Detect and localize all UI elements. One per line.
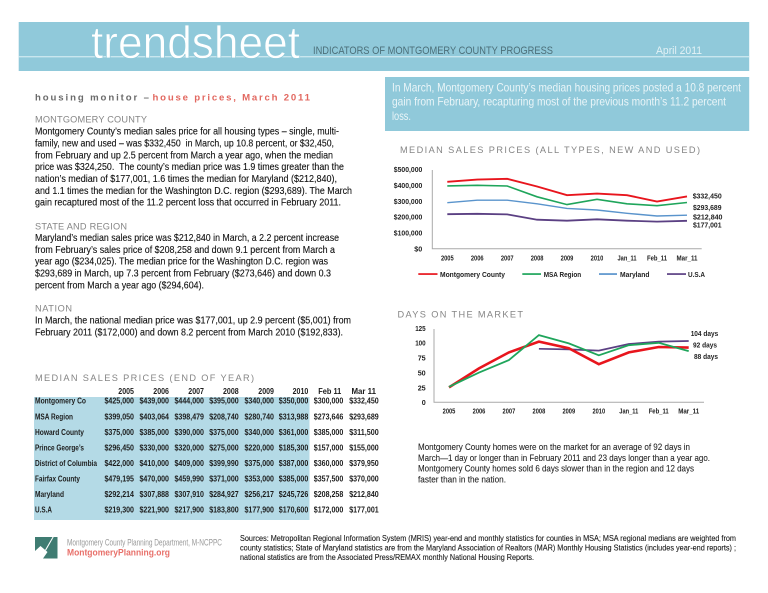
line: Montgomery County [449,342,689,387]
row: District of Columbia: $375,000 [244,459,275,468]
y axis labels: 50 [418,368,426,378]
x axis labels: 2008 [533,407,545,416]
row: Maryland: $212,840 [349,490,379,499]
row: Fairfax County: $459,990 [174,474,205,483]
text block: State and Region: year ago ($234,025). The median price for the Washington D.C. region was [35,256,328,268]
row: Howard County: $375,000 [104,428,135,437]
row: Prince George's: $275,000 [209,443,239,452]
y axis labels: $500,000 [394,165,422,174]
row: Howard County: $390,000 [174,428,205,437]
department credit [67,538,222,558]
row: Fairfax County: $353,000 [244,474,275,483]
end-point labels: 92 days [693,341,717,350]
row: Montgomery Co: $395,000 [209,397,239,406]
text block: Montgomery County: MONTGOMERY COUNTY [35,114,147,124]
row: Prince George's: $320,000 [174,443,205,452]
row: District of Columbia: $399,990 [209,459,239,468]
line: U.S.A [539,341,689,351]
row: U.S.A: $219,300 [104,505,135,514]
y axis labels [394,165,422,254]
row: Prince George's: $220,000 [244,443,275,452]
y axis labels: 125 [415,324,426,333]
row: Howard County: $385,000 [140,428,170,437]
y axis labels: 0 [422,398,426,407]
row: Howard County: $385,000 [314,428,344,437]
x axis labels: 2005 [443,407,455,416]
y axis labels [415,324,426,407]
table header row: 2007 [188,387,204,396]
x axis labels: Feb_11 [649,407,669,416]
text block: days on market commentary: faster than in the nation. [418,475,506,486]
x axis labels: Mar_11 [678,407,699,416]
text block: Montgomery County: nation’s median of $177,001, 1.6 times the median for Maryland ($212,840), [35,174,337,185]
text block: days on market commentary: Montgomery County homes sold 6 days slower than in the region and 12 days [418,464,694,475]
row: U.S.A: $177,900 [244,505,275,514]
department credit: Montgomery County Planning Department, M-NCPPC [67,538,222,548]
row: Howard County: $361,000 [279,428,309,437]
x axis labels: Jan_11 [619,407,638,416]
x axis labels: 2008 [531,253,543,262]
text block: Montgomery County: from February and up 2.5 percent from March a year ago, when the median [35,150,333,161]
row: Montgomery Co: $340,000 [244,397,275,406]
x axis labels: 2006 [473,407,485,416]
row: U.S.A: $172,000 [314,505,344,514]
legend: Montgomery County [440,270,505,279]
text block: Nation [35,304,351,339]
row: Fairfax County: $385,000 [279,474,309,483]
row: MSA Region [35,412,379,421]
row: District of Columbia: $387,000 [279,459,309,468]
row: Maryland: $307,910 [174,490,205,499]
row: Fairfax County: Fairfax County [35,474,81,483]
y axis labels: $300,000 [394,197,422,206]
row: District of Columbia: $410,000 [140,459,170,468]
row: Howard County: $375,000 [209,428,239,437]
table header row: 2010 [293,387,309,396]
text block: Montgomery County [35,114,352,208]
row: Prince George's [35,443,379,452]
table: median sales prices [34,387,379,520]
text block: Montgomery County: Montgomery County’s median sales price for all housing types – single, multi- [35,127,339,138]
row: MSA Region: $398,479 [174,412,205,421]
row: Prince George's: Prince George’s [35,443,85,452]
row: District of Columbia: $409,000 [174,459,205,468]
row: Howard County: $311,500 [349,428,379,437]
text block: days on market commentary [418,442,710,486]
y axis labels: 100 [415,338,426,348]
y axis labels: $400,000 [394,181,422,190]
icon: planning department logo [35,537,58,558]
row: Fairfax County: $371,000 [209,474,239,483]
chart heading: median sales prices: MEDIAN SALES PRICES (ALL TYPES, NEW AND USED) [400,145,700,155]
line chart: days on the market [415,324,718,416]
row: Montgomery Co: $332,450 [349,397,379,406]
row: District of Columbia: $360,000 [314,459,344,468]
x axis labels: 2009 [562,407,575,416]
row: Maryland: $284,927 [209,490,239,499]
row: Fairfax County [35,474,379,483]
row: U.S.A: $177,001 [349,505,379,514]
row: Prince George's: $185,300 [279,443,309,452]
table header row: Feb 11 [318,387,342,396]
x axis labels: Jan_11 [618,253,636,262]
row: Maryland [35,490,379,499]
row: Montgomery Co: $444,000 [174,397,205,406]
table header row: 2009 [258,387,275,396]
line: MSA Region [447,185,687,206]
row: Montgomery Co: $425,000 [104,397,135,406]
subtitle: INDICATORS OF MONTGOMERY COUNTY PROGRESS [313,45,553,57]
line: MSA Region [449,335,689,387]
row: Montgomery Co: $439,000 [140,397,170,406]
callout [385,77,749,131]
row: Maryland: $307,888 [140,490,170,499]
sources note [240,533,736,562]
row: MSA Region: $313,988 [279,412,309,421]
x axis labels: 2010 [592,407,605,416]
line chart: median sales prices [394,165,722,279]
text block: State and Region: percent from March a year ago ($294,604). [35,280,204,292]
row: Maryland: $208,258 [314,490,344,499]
line: Montgomery County [447,179,687,202]
chart heading: days on the market: DAYS ON THE MARKET [398,309,523,319]
row: District of Columbia: $422,000 [104,459,135,468]
end-point labels: 104 days [691,329,718,338]
row: U.S.A: $183,800 [209,505,239,514]
text block: State and Region: from February’s sales price of $208,258 and down 9.1 percent from March a [35,245,335,256]
table header row: Mar 11 [352,387,377,396]
x axis labels: Mar_11 [676,253,698,262]
legend: MSA Region [544,270,581,279]
row: Fairfax County: $370,000 [349,474,379,483]
y axis labels: $200,000 [394,212,422,222]
row: U.S.A: U.S.A [35,505,52,514]
text block: State and Region: STATE AND REGION [35,221,127,231]
row: Howard County: $340,000 [244,428,275,437]
row: Prince George's: $330,000 [140,443,170,452]
row: Fairfax County: $357,500 [314,474,344,483]
row: U.S.A: $221,900 [140,505,170,514]
row: Maryland: $256,217 [244,490,274,499]
end-point labels [691,329,718,361]
text block: days on market commentary: Montgomery County homes were on the market for an average of 92 days in [418,442,690,453]
row: U.S.A: $217,900 [174,505,205,514]
text block: Nation: In March, the national median price was $177,001, up 2.9 percent ($5,001) from [35,316,351,327]
row: MSA Region: $208,740 [209,412,239,421]
row: U.S.A [35,505,379,514]
row: Prince George's: $155,000 [349,443,379,452]
date: April 2011 [656,45,702,57]
row: MSA Region: $403,064 [140,412,170,421]
row: District of Columbia: District of Columbia [35,459,98,468]
table heading: MEDIAN SALES PRICES (END OF YEAR) [35,373,254,383]
x axis labels: 2009 [561,253,573,262]
x axis labels [443,407,699,416]
row: MSA Region: $273,646 [314,412,344,421]
text block: days on market commentary: March—1 day or longer than in February 2011 and 23 days longer than a year ago. [418,453,710,464]
row: MSA Region: $280,740 [244,412,275,421]
row: Fairfax County: $470,000 [140,474,170,483]
end-point labels: $293,689 [693,203,722,212]
end-point labels: 88 days [694,352,718,361]
text block: Montgomery County: and 1.1 times the median for the Washington D.C. region ($293,689). The March [35,186,352,197]
row: MSA Region: $399,050 [104,412,135,421]
legend: Maryland [620,270,650,279]
row: Montgomery Co: Montgomery Co [35,397,86,406]
text block: Montgomery County: family, new and used – was $332,450 in March, up 10.8 percent, or $32,450, [35,139,334,150]
x axis labels: 2007 [503,407,515,416]
row: Prince George's: $157,000 [314,443,344,452]
legend [418,270,705,279]
end-point labels: $332,450 [693,191,722,200]
legend: U.S.A [688,270,705,279]
department credit: MontgomeryPlanning.org [67,548,170,558]
x axis labels [441,253,698,262]
x axis labels: 2005 [441,253,454,262]
section heading: housing monitor [35,92,311,104]
row: Maryland: $245,726 [279,490,309,499]
row: MSA Region: MSA Region [35,412,73,421]
row: Howard County: Howard County [35,428,85,437]
table header row [118,387,377,396]
row: Howard County [35,428,379,437]
x axis labels: 2006 [471,253,484,262]
row: District of Columbia: $379,950 [349,459,379,468]
row: Montgomery Co [35,397,379,406]
end-point labels: $212,840 [693,212,722,221]
x axis labels: 2010 [591,253,603,262]
row: Fairfax County: $479,195 [104,474,135,483]
header band [19,17,749,71]
text block: Montgomery County: gain recaptured most of the 11.2 percent loss that occurred in February 2011. [35,198,341,208]
sources note: national statistics are from the Associated Press/REMAX monthly National Housing Reports. [240,552,534,562]
line: U.S.A [447,214,687,222]
end-point labels [693,191,722,230]
y axis labels: $100,000 [394,228,422,238]
text block: State and Region: $293,689 in March, up 7.3 percent from February ($273,646) and down 0.3 [35,269,331,280]
section heading: housing monitor: housing monitor – [35,92,150,104]
text block: State and Region: Maryland’s median sales price was $212,840 in March, a 2.2 percent increase [35,233,339,244]
table header row: 2006 [153,387,170,396]
text block: State and Region [35,221,339,292]
row: District of Columbia [35,459,379,468]
row: Maryland: Maryland [35,490,64,499]
end-point labels: $177,001 [693,221,722,230]
y axis labels: $0 [414,244,422,254]
text block: Nation: NATION [35,304,72,314]
text block: Nation: February 2011 ($172,000) and down 8.2 percent from March 2010 ($192,833). [35,328,343,339]
text block: Montgomery County: price was $324,250. The county’s median price was 1.9 times greater than the [35,162,344,173]
row: Prince George's: $296,450 [104,443,135,452]
table header row: 2005 [118,387,135,396]
row: Maryland: $292,214 [104,490,135,499]
title: trendsheet [91,17,300,68]
section heading: housing monitor: house prices, March 2011 [152,92,311,104]
row: Montgomery Co: $350,000 [279,397,309,406]
x axis labels: Feb_11 [647,253,667,262]
x axis labels: 2007 [501,253,514,262]
callout: loss. [392,109,411,123]
row: MSA Region: $293,689 [349,412,379,421]
table header row: 2008 [223,387,239,396]
y axis labels: 75 [418,354,426,362]
row: U.S.A: $170,600 [279,505,309,514]
y axis labels: 25 [418,384,426,392]
line: Maryland [447,200,687,216]
row: Montgomery Co: $300,000 [314,397,344,406]
